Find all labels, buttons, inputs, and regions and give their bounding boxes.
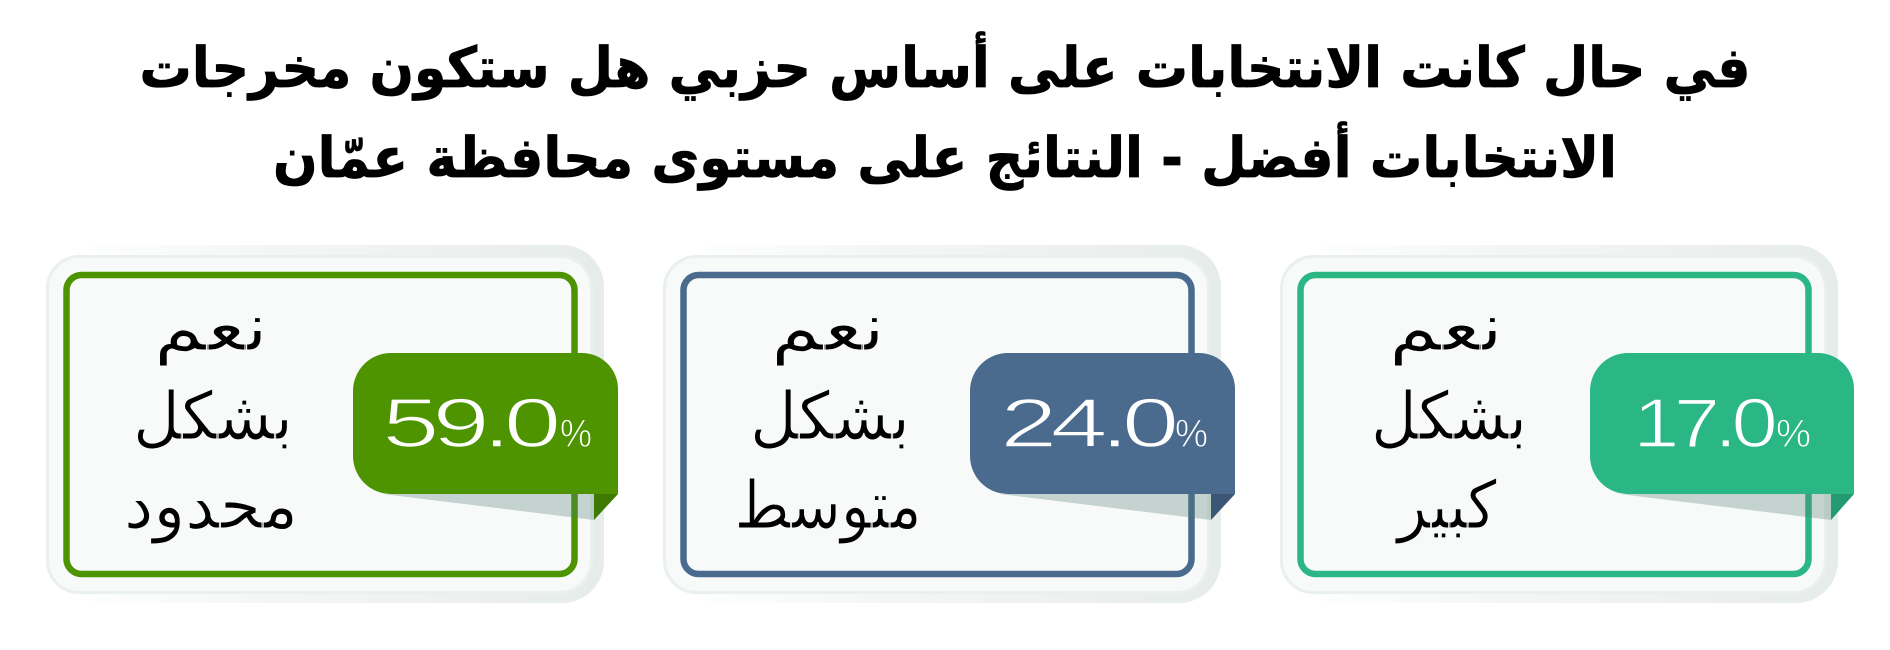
badge: 17.0%: [1590, 353, 1854, 520]
label: yes large: نعم: [1389, 289, 1503, 366]
panel: large 17.0%: [1282, 245, 1854, 603]
label: yes medium: متوسط: [734, 467, 922, 544]
label: yes medium: بشكل: [750, 378, 910, 455]
label: yes limited: بشكل: [133, 378, 293, 455]
title: الانتخابات أفضل - النتائج على مستوى محافظة عمّان: [273, 121, 1617, 191]
badge: 59.0%: %: [560, 413, 592, 456]
badge: 24.0%: 24.0: [1000, 384, 1177, 462]
label: yes large: كبير: [1395, 467, 1497, 544]
panel: medium 24.0%: [664, 245, 1235, 603]
label: yes medium: نعم: [771, 289, 885, 366]
badge: 59.0%: 59.0: [382, 384, 559, 462]
badge: 24.0%: %: [1175, 413, 1208, 456]
badge: 24.0%: [970, 353, 1235, 520]
badge: 17.0%: %: [1776, 413, 1811, 456]
label: yes large: بشكل: [1371, 378, 1527, 455]
label: yes limited: محدود: [124, 467, 298, 544]
badge: 17.0%: 17.0: [1633, 384, 1776, 462]
label: yes limited: [124, 289, 298, 544]
panel: limited 59.0%: [48, 245, 618, 603]
title: في حال كانت الانتخابات على أساس حزبي هل ستكون مخرجات: [140, 31, 1750, 101]
label: yes large: [1371, 289, 1527, 544]
badge: 59.0%: [353, 353, 618, 520]
title: [140, 31, 1750, 191]
label: yes medium: [734, 289, 922, 544]
label: yes limited: نعم: [154, 289, 268, 366]
